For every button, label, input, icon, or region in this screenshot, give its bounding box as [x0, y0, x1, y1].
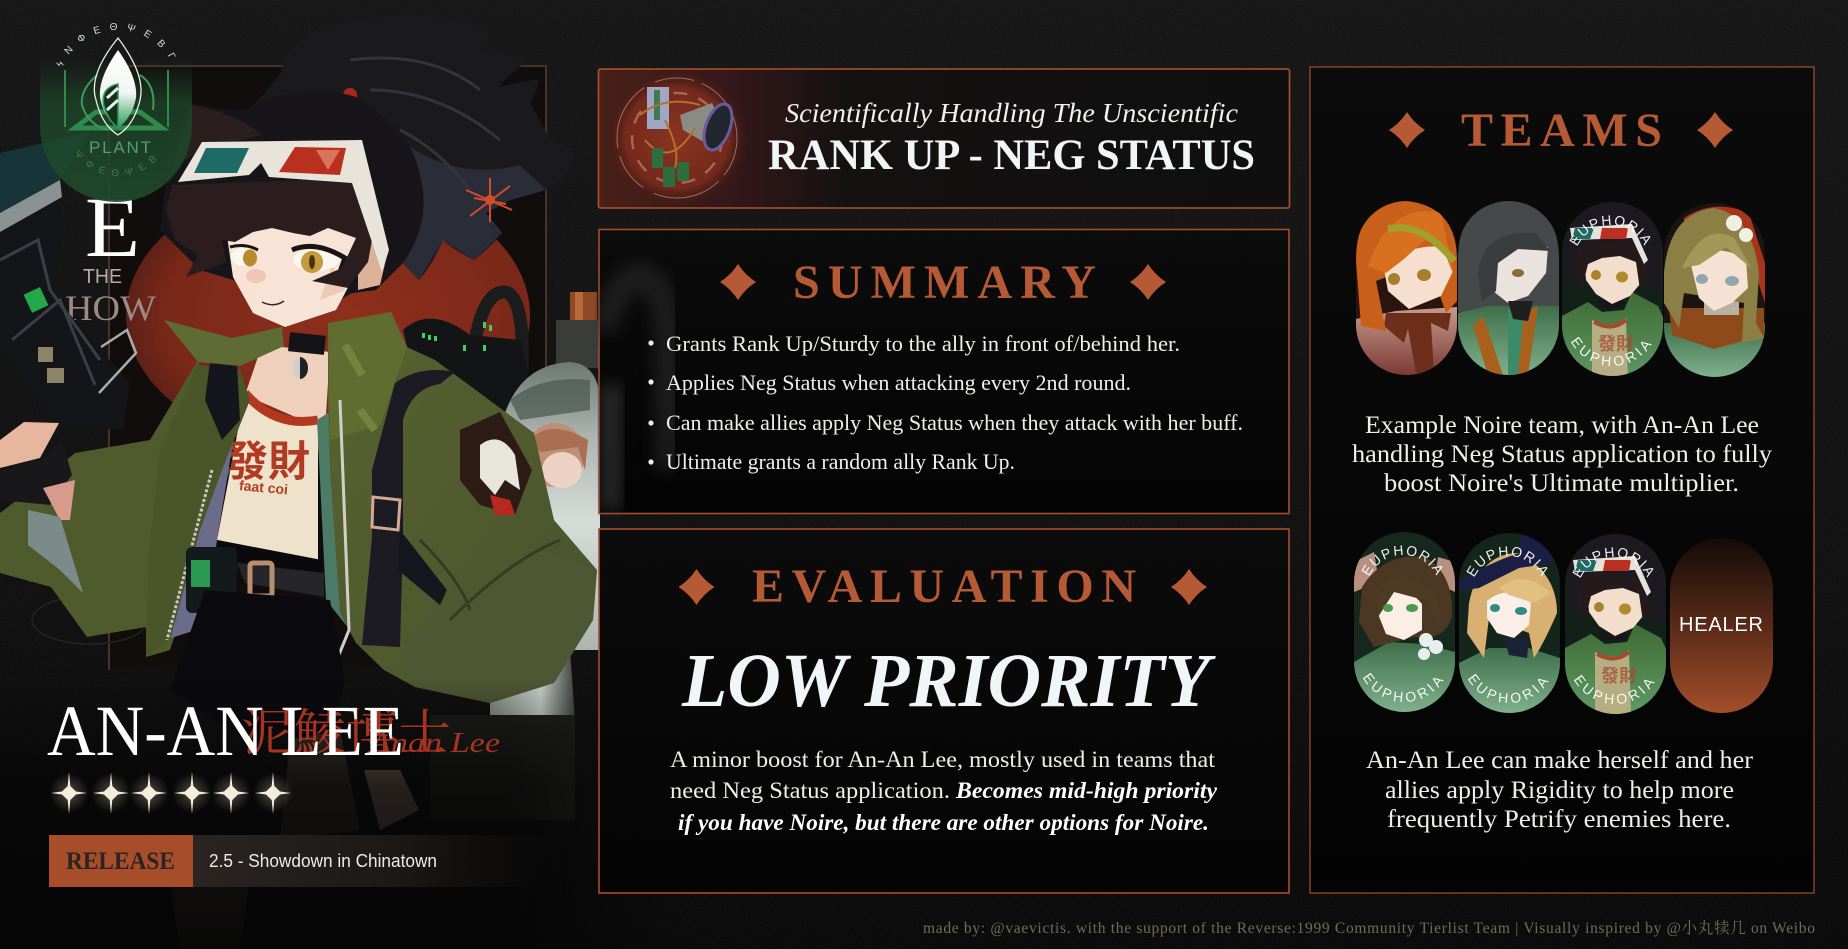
t-shirt: faat coi [238, 477, 289, 497]
portrait: An-An Lee with Euphoria (second team) [1565, 534, 1666, 714]
evaluation text: A minor boost for An-An Lee, mostly used in teams that [670, 747, 1216, 772]
portrait: An-An Lee with Euphoria: EUPHORIA [1569, 215, 1650, 246]
backpack strap [362, 370, 455, 647]
bullet list: Applies Neg Status when attacking every 2nd round. [666, 370, 1131, 395]
ghost of tank seen through panel [600, 276, 668, 510]
orange spark [466, 178, 512, 222]
priority verdict: LOW PRIORITY [681, 639, 1216, 723]
team 1 caption: handling Neg Status application to fully [1352, 441, 1773, 468]
portrait: grey hair [1458, 201, 1559, 375]
team 1 caption [1352, 412, 1773, 497]
plant afflatus badge: ΨΦΕΘΨΕΒ [76, 150, 156, 176]
release tag: RELEASE [66, 848, 175, 875]
icon: megaphone device [617, 78, 737, 198]
signature: Anan Lee [368, 728, 500, 759]
release tag [49, 835, 553, 887]
team 2 caption: An-An Lee can make herself and her [1366, 747, 1754, 774]
release tag: 2.5 - Showdown in Chinatown [209, 851, 437, 871]
heading: summary: SUMMARY [793, 256, 1096, 309]
jacket left panel [146, 365, 250, 657]
3D glasses [178, 140, 389, 272]
healer slot [1670, 538, 1773, 713]
heading: evaluation: EVALUATION [752, 560, 1136, 613]
poster title text [27, 179, 156, 644]
evaluation text: need Neg Status application. [670, 778, 950, 803]
rear hose and backpack [403, 292, 535, 440]
hand [0, 422, 83, 593]
panel: rank up [598, 68, 1290, 208]
team 2 caption [1366, 747, 1754, 833]
team 2 caption: frequently Petrify enemies here. [1387, 806, 1731, 833]
plant afflatus badge [40, 23, 192, 202]
belt and pager [186, 540, 324, 613]
oxygen tank with doll [430, 292, 600, 820]
portrait: brown wavy hair with Euphoria: EUPHORIA [1363, 672, 1444, 702]
bottom fade [0, 687, 575, 949]
team 1 caption: Example Noire team, with An-An Lee [1365, 412, 1759, 439]
footer credit: made by: @vaevictis. with the support of the Reverse:1999 Community Tierlist Team | Visually inspired by @小丸犊几 on Weibo [923, 919, 1815, 937]
heading: teams [1389, 104, 1733, 157]
heading: teams: TEAMS [1461, 104, 1662, 157]
ponytail hair [250, 16, 573, 300]
portrait: brown wavy hair with Euphoria: EUPHORIA [1361, 545, 1442, 576]
portrait: blonde with navy hat, Euphoria [1459, 533, 1560, 713]
portrait: An-An Lee with Euphoria [1562, 202, 1663, 376]
portrait: blonde with navy hat, Euphoria: EUPHORIA [1468, 674, 1549, 703]
bangs [166, 178, 372, 288]
rarity stars [49, 772, 293, 814]
head hair [160, 92, 424, 300]
jacket lining [317, 400, 350, 630]
portrait: An-An Lee with Euphoria (second team): EUPHORIA [1572, 547, 1654, 578]
bullet list: Ultimate grants a random ally Rank Up. [666, 449, 1015, 474]
eyes [230, 246, 345, 273]
leaf emblem [65, 38, 168, 135]
portrait: brown wavy hair with Euphoria [1354, 532, 1455, 712]
jacket collar [164, 320, 284, 366]
title: RANK UP - NEG STATUS [768, 132, 1255, 179]
character name: AN-AN LEE [47, 691, 404, 771]
poster title text: THE [83, 266, 122, 288]
shorts [170, 590, 345, 740]
panel: teams [1309, 66, 1815, 894]
skirt and legs [170, 730, 419, 949]
face [225, 222, 387, 327]
evaluation text: Becomes mid-high priority [955, 778, 1218, 803]
chest and choker [245, 332, 330, 430]
jacket right panel and sleeve [328, 312, 597, 703]
healer slot: HEALER [1679, 614, 1763, 636]
signature: 泥鯪博士 [241, 693, 451, 765]
poster backdrop [109, 66, 546, 670]
t-shirt [217, 393, 318, 560]
poster title text: E [85, 179, 140, 275]
gun [0, 132, 136, 430]
bullet list: Can make allies apply Neg Status when they attack with her buff. [666, 410, 1243, 435]
poster title text: F [27, 557, 44, 588]
team 2 caption: allies apply Rigidity to help more [1385, 777, 1734, 804]
bullet list: Grants Rank Up/Sturdy to the ally in front of/behind her. [666, 331, 1180, 356]
portrait: An-An Lee with Euphoria (second team): EUPHORIA [1574, 674, 1655, 704]
panel: summary [599, 230, 1289, 514]
poster title text: HOW [65, 288, 156, 328]
team 1 caption: boost Noire's Ultimate multiplier. [1384, 470, 1739, 497]
evaluation text [670, 747, 1218, 835]
ear [358, 240, 387, 290]
logo arc text: ϟΝΦΕΘΨΕΒΓ [56, 23, 176, 66]
left arm sleeve [0, 360, 230, 657]
zipper [332, 400, 349, 672]
t-shirt: 發財 [226, 438, 310, 485]
PLANT label: PLANT [89, 138, 151, 157]
heading: summary [720, 256, 1166, 309]
panel: evaluation [599, 529, 1289, 893]
portrait: blonde braids [1664, 203, 1765, 377]
portrait: orange hair [1356, 201, 1457, 375]
portrait: An-An Lee with Euphoria: EUPHORIA [1571, 336, 1652, 366]
ghost patch [460, 412, 532, 515]
character art: An-An Lee [0, 16, 600, 949]
evaluation text: if you have Noire, but there are other options for Noire. [678, 810, 1209, 835]
bullet list [648, 331, 1243, 474]
subtitle: Scientifically Handling The Unscientific [785, 98, 1238, 128]
portrait: blonde with navy hat, Euphoria: EUPHORIA [1466, 546, 1548, 577]
